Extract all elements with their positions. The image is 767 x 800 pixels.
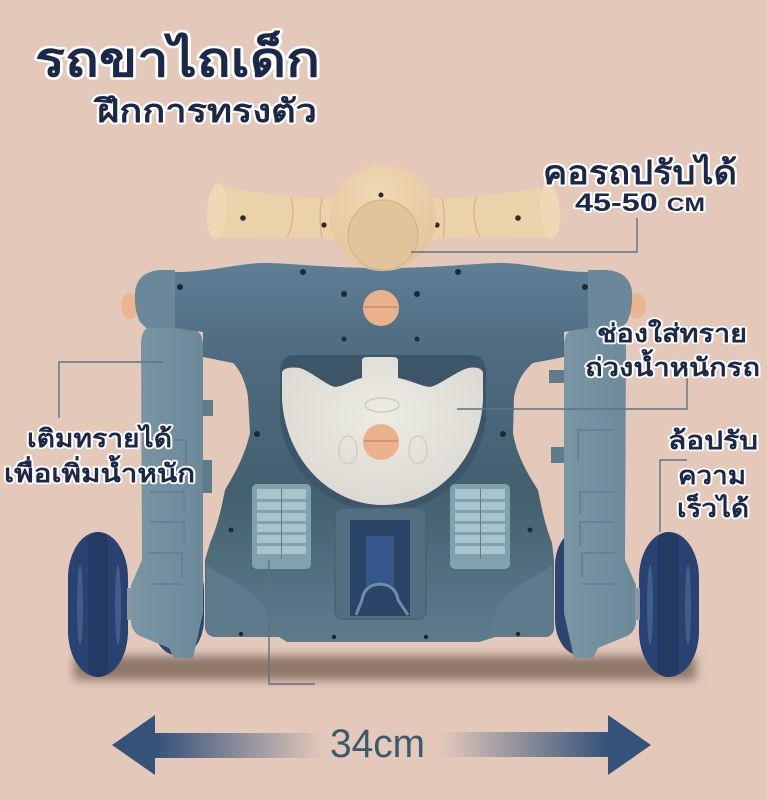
dimension label: 34cm (330, 722, 425, 766)
corner caps (135, 270, 175, 328)
legs lower flare and wheels (131, 328, 636, 658)
neck ball (330, 165, 436, 271)
left side tabs (203, 400, 213, 493)
handlebar left grip (205, 182, 340, 240)
subtitle: ฝึกการทรงตัว (93, 93, 317, 129)
right leg ridges (578, 430, 616, 584)
dimension arrow left (112, 715, 325, 775)
left leg (131, 328, 203, 658)
right side tabs (549, 370, 564, 463)
label: wheel line 2: ความ (678, 462, 746, 490)
label: adjustable neck: คอรถปรับได้ (543, 153, 737, 191)
label: refill sand line 1: เติมทรายได้ (27, 423, 172, 453)
label: refill sand line 2: เพื่อเพิ่มน้ำหนัก (4, 454, 195, 488)
leader line: neck (411, 218, 637, 252)
label: sand slot line 2: ถ่วงน้ำหนักรถ (585, 348, 760, 382)
window cavity (280, 355, 486, 512)
lower fenders (205, 565, 554, 637)
walker product illustration (68, 165, 699, 677)
main body (135, 263, 632, 642)
leader line: base (269, 560, 315, 684)
right pedal (450, 484, 510, 569)
left leg ridges (148, 440, 186, 584)
right front wheel (635, 532, 699, 677)
leader line: sand fill (59, 362, 163, 418)
centre storage slot (335, 508, 426, 619)
handlebar right grip (425, 182, 562, 240)
tank knob (363, 424, 399, 460)
left pedal (252, 484, 311, 569)
leader line: sand slot (457, 378, 687, 409)
screw holes (177, 269, 588, 639)
label: sand slot line 1: ช่องใส่ทราย (597, 318, 747, 348)
floor shadow (74, 656, 696, 680)
tank oval details (339, 398, 427, 464)
back wheels (152, 530, 607, 655)
sand tank (282, 357, 483, 505)
label: neck range: 45-50 CM (575, 189, 705, 217)
top knob (363, 290, 399, 326)
left front wheel (68, 532, 132, 677)
dimension arrow right (440, 715, 651, 775)
label: wheel line 3: เร็วได้ (677, 493, 749, 523)
leader line: wheel speed (660, 460, 687, 532)
label: wheel line 1: ล้อปรับ (668, 427, 758, 455)
right leg (564, 328, 636, 658)
side knobs (121, 293, 646, 319)
title: รถขาไถเด็ก (35, 30, 320, 87)
